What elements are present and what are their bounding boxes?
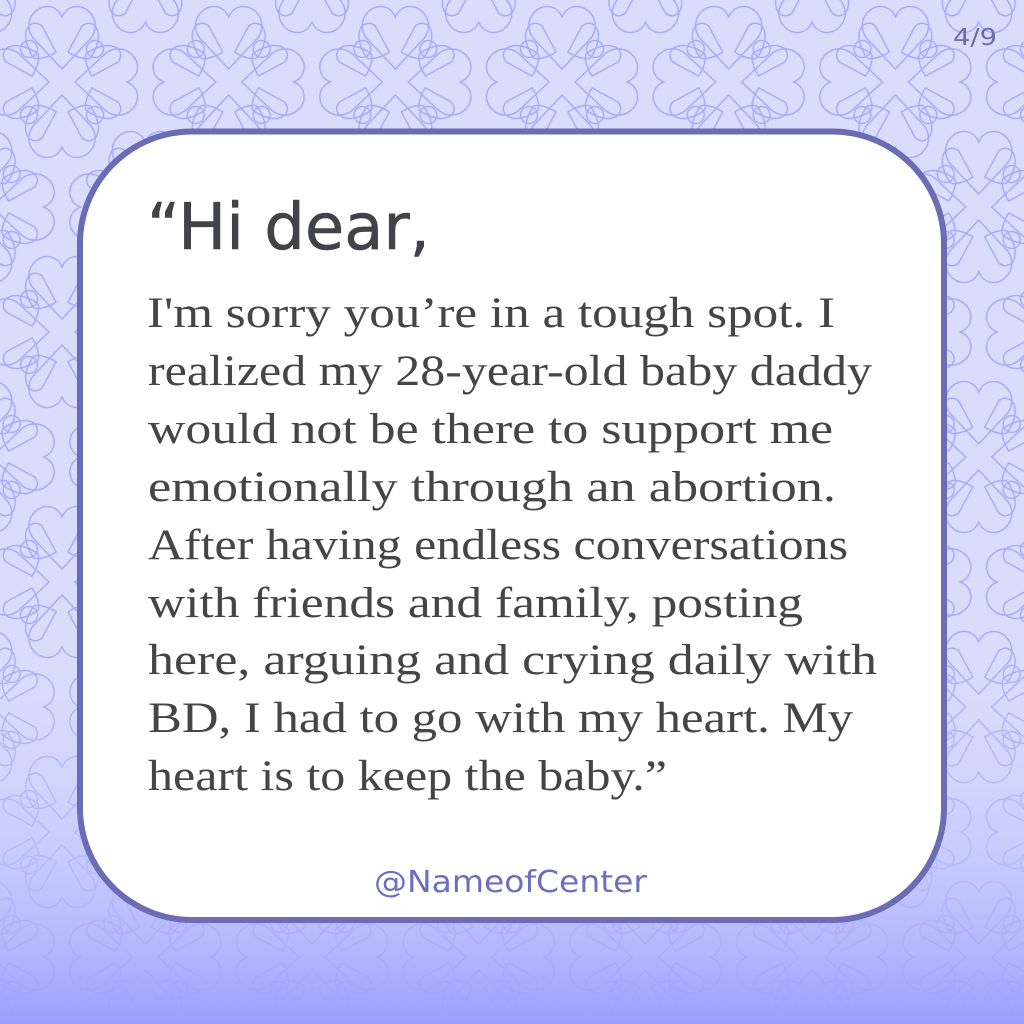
quote body text: heart is to keep the baby.” <box>148 753 667 800</box>
heading: “Hi dear, <box>147 191 430 265</box>
bottom gradient <box>0 640 1024 1024</box>
page number: 4/9 <box>953 25 997 51</box>
quote body text: here, arguing and crying daily with <box>148 637 877 684</box>
quote body text: emotionally through an abortion. <box>148 464 836 511</box>
quote body text: After having endless conversations <box>148 522 848 569</box>
handle: @NameofCenter <box>374 865 648 900</box>
quote body text: I'm sorry you’re in a tough spot. I <box>147 290 835 337</box>
quote body text: with friends and family, posting <box>148 580 803 627</box>
quote body text: realized my 28-year-old baby daddy <box>148 348 873 395</box>
quote body text <box>147 290 877 800</box>
panel: quote card <box>80 132 944 920</box>
quote body text: BD, I had to go with my heart. My <box>148 695 854 742</box>
quote body text: would not be there to support me <box>148 406 833 453</box>
